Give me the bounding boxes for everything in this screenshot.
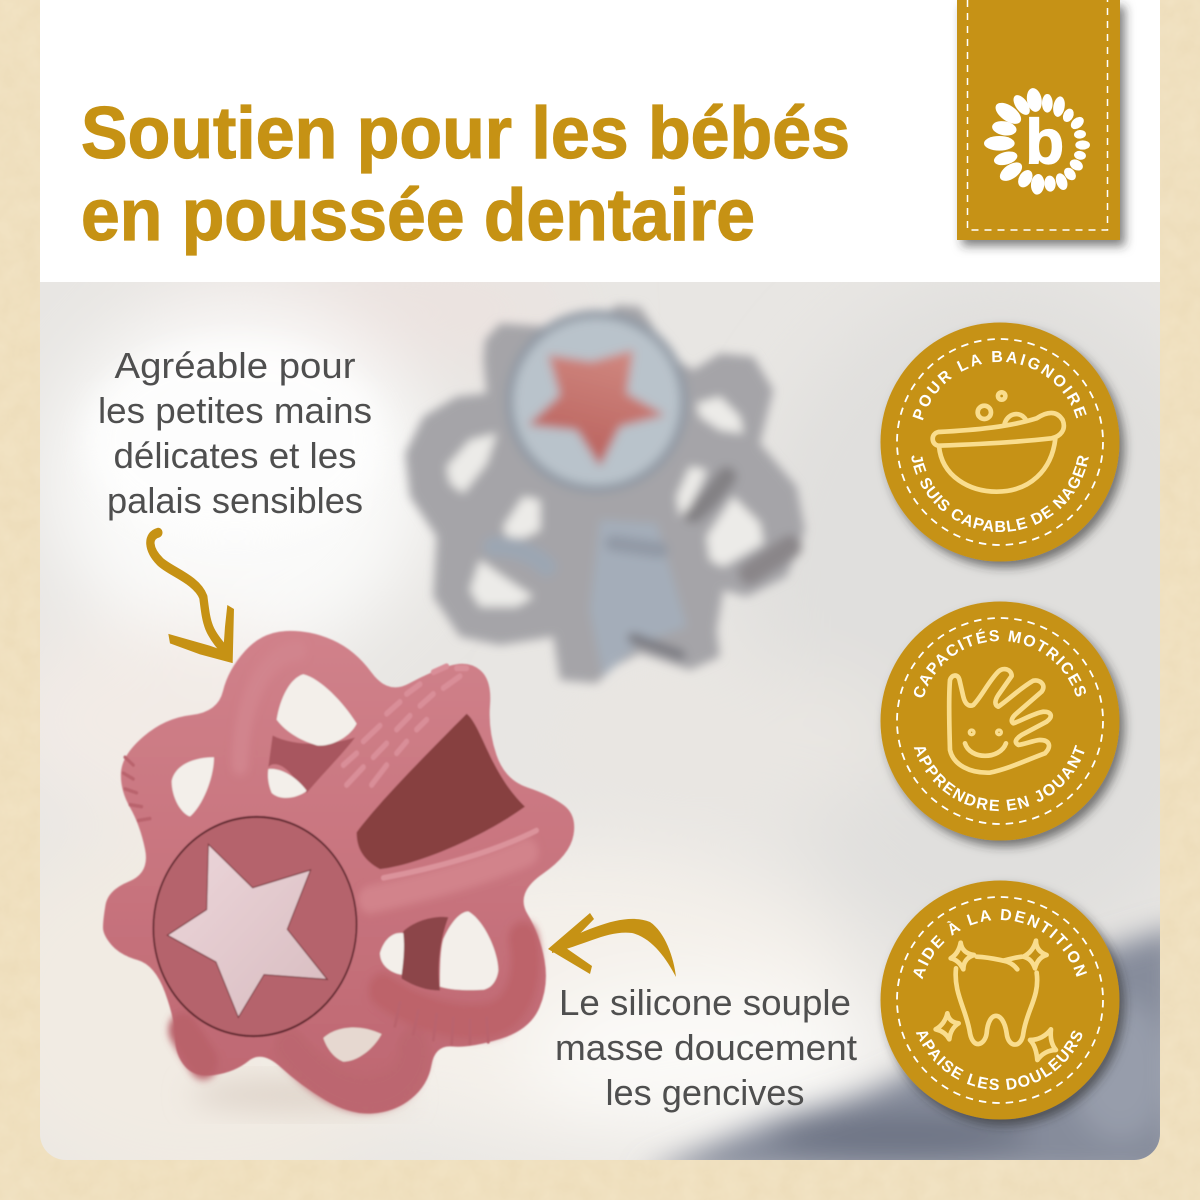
badge: motor skills: APPRENDRE EN JOUANT [914,744,1084,812]
callout text: left: palais sensibles [107,480,363,521]
teether silhouette [103,631,574,1114]
brand tag with logo [957,0,1120,240]
badge: teething: AIDE À LA DENTITION [913,908,1087,980]
badge: teething [878,879,1131,1132]
pink teether [103,631,574,1114]
icon: smiling hand [949,669,1051,773]
icon: bathtub [933,392,1064,492]
title: Soutien pour les bébés [81,93,850,174]
disc with star [152,815,358,1038]
callout text: left: les petites mains [98,390,372,431]
grey teether holes [447,397,763,607]
callout text: left: délicates et les [114,435,356,476]
white header panel [40,0,1160,282]
teether ground shadow [190,1077,410,1113]
teether shading [183,650,527,1094]
callout text: left: Agréable pour [114,345,356,386]
callout text: right: masse doucement [555,1027,857,1068]
badge: bath: POUR LA BAIGNOIRE [912,351,1087,420]
icon: sunflower logo: b [1025,107,1064,177]
teether holes [172,674,498,1062]
badge: teething: APAISE LES DOULEURS [916,1030,1082,1090]
grey teether (blurred) [405,305,805,683]
arrow: curved pointing to teether [548,913,676,977]
icon: tooth with sparkles [936,941,1056,1060]
badge: motor skills [878,600,1132,854]
badge: bath [878,321,1132,575]
towel [640,925,1180,1180]
title [81,93,850,256]
title: en poussée dentaire [81,175,755,256]
callout text: left [98,345,372,521]
badge: bath: JE SUIS CAPABLE DE NAGER [911,455,1089,532]
photo panel [40,282,1160,1160]
badge: motor skills: CAPACITÉS MOTRICES [914,628,1086,698]
white text glow, left callout [85,340,385,540]
callout text: right [555,982,857,1113]
callout text: right: Le silicone souple [559,982,851,1023]
arrow: wavy pointing to teether [150,533,234,663]
callout text: right: les gencives [606,1072,804,1113]
photo backdrop [40,282,1160,1160]
ridges [343,666,467,785]
icon: sunflower logo [984,87,1090,195]
